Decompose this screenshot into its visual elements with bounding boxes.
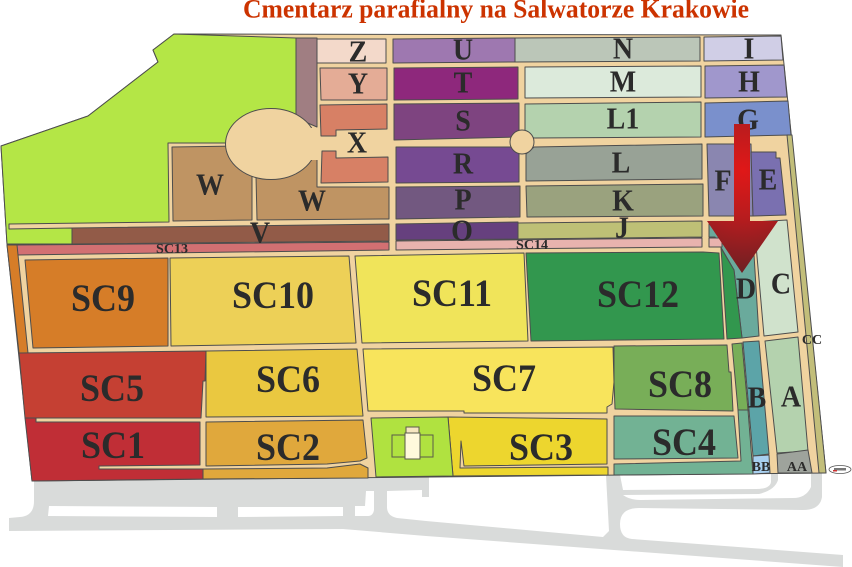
labels: S xyxy=(455,104,471,138)
plot L1 xyxy=(525,102,701,138)
small roundabout xyxy=(510,130,534,154)
plot M xyxy=(525,66,701,98)
plot V xyxy=(72,224,389,244)
labels: L xyxy=(612,146,630,180)
labels: C xyxy=(771,267,791,301)
labels: SC12 xyxy=(597,273,679,317)
plot W right xyxy=(256,150,389,220)
labels: Z xyxy=(349,35,367,69)
labels: AA xyxy=(787,460,808,475)
labels: Y xyxy=(348,67,368,101)
labels: G xyxy=(737,103,759,137)
plot AA xyxy=(777,450,812,473)
logo xyxy=(829,466,851,474)
plot U xyxy=(393,38,515,63)
plot N xyxy=(515,37,700,62)
plot SC8 xyxy=(614,345,733,411)
paths base xyxy=(1,34,826,481)
labels: M xyxy=(610,65,636,99)
plot W left xyxy=(172,146,252,221)
labels: SC13 xyxy=(156,242,188,257)
labels: N xyxy=(613,32,633,66)
plot F xyxy=(707,144,753,216)
plot SC3 xyxy=(448,417,608,476)
plot SC1 xyxy=(25,418,203,481)
labels: D xyxy=(736,272,756,306)
neck xyxy=(300,128,330,160)
labels: O xyxy=(451,214,473,248)
labels: J xyxy=(615,211,629,245)
labels: SC7 xyxy=(472,357,536,401)
plot R xyxy=(396,147,519,183)
labels: U xyxy=(453,33,473,67)
plot P xyxy=(396,186,520,219)
strip CC xyxy=(787,135,826,473)
arrow xyxy=(707,124,778,273)
labels: I xyxy=(744,32,754,66)
plot A xyxy=(765,337,808,453)
labels: BB xyxy=(752,460,770,475)
plot SC13 xyxy=(17,242,389,255)
plot Y xyxy=(320,68,387,100)
plot B xyxy=(743,341,769,456)
labels: B xyxy=(748,381,766,415)
road cross xyxy=(515,137,529,148)
plot I xyxy=(704,36,783,61)
chapel xyxy=(392,427,433,459)
plot SC4 lower xyxy=(614,410,753,475)
plot SC4 xyxy=(614,416,738,459)
plot T xyxy=(394,67,518,100)
plot X top xyxy=(320,104,387,136)
plot SC2 lower xyxy=(203,464,368,479)
labels: SC2 xyxy=(256,426,320,470)
SC8 strip xyxy=(732,343,748,410)
mauve strip xyxy=(296,38,317,127)
plot teal top xyxy=(709,222,759,338)
labels: SC5 xyxy=(80,367,144,411)
roundabout xyxy=(226,108,316,180)
plot H xyxy=(705,65,787,98)
plot C xyxy=(754,220,798,336)
pink right xyxy=(709,238,722,247)
labels: W xyxy=(298,184,326,218)
plot K xyxy=(526,184,703,217)
labels: F xyxy=(714,164,732,198)
plot E xyxy=(751,152,786,216)
plot J xyxy=(518,221,702,239)
labels: V xyxy=(250,216,270,250)
labels xyxy=(71,32,822,475)
plot SC12 xyxy=(526,252,724,341)
plot BB xyxy=(753,455,770,474)
labels: SC3 xyxy=(509,426,573,470)
labels: SC6 xyxy=(256,358,320,402)
labels: T xyxy=(454,66,473,100)
labels: A xyxy=(781,380,802,414)
plot SC9 xyxy=(25,258,168,348)
plot SC10 xyxy=(170,256,356,346)
labels: K xyxy=(612,184,634,218)
plot X bottom xyxy=(321,151,388,183)
surrounding roads xyxy=(9,472,843,567)
labels: W xyxy=(196,168,224,202)
green area xyxy=(1,34,297,244)
labels: L1 xyxy=(607,102,639,136)
plot SC7 xyxy=(363,347,614,413)
plot O xyxy=(396,222,518,240)
labels: SC14 xyxy=(516,238,548,253)
labels: SC1 xyxy=(81,424,145,468)
plot SC14 xyxy=(396,238,702,250)
orange strip xyxy=(7,245,28,353)
plot SC6 xyxy=(206,349,363,417)
plot SC5 xyxy=(19,351,206,418)
labels: E xyxy=(759,163,777,197)
cemetery map xyxy=(1,34,826,481)
labels: SC10 xyxy=(232,274,314,318)
plot L xyxy=(526,144,702,181)
plot SC2 xyxy=(206,420,367,466)
plot Z xyxy=(317,39,386,63)
labels: CC xyxy=(802,333,822,348)
plot S xyxy=(394,103,519,140)
labels: R xyxy=(453,147,474,181)
plot G xyxy=(705,101,791,137)
labels: H xyxy=(738,65,760,99)
green square xyxy=(371,417,453,477)
labels: SC11 xyxy=(412,272,492,316)
plot SC11 xyxy=(355,253,528,343)
labels: SC9 xyxy=(71,277,135,321)
labels: SC4 xyxy=(652,421,716,465)
labels: X xyxy=(347,126,367,160)
labels: P xyxy=(454,183,472,217)
green strip by D xyxy=(721,248,742,339)
labels: SC8 xyxy=(648,363,712,407)
